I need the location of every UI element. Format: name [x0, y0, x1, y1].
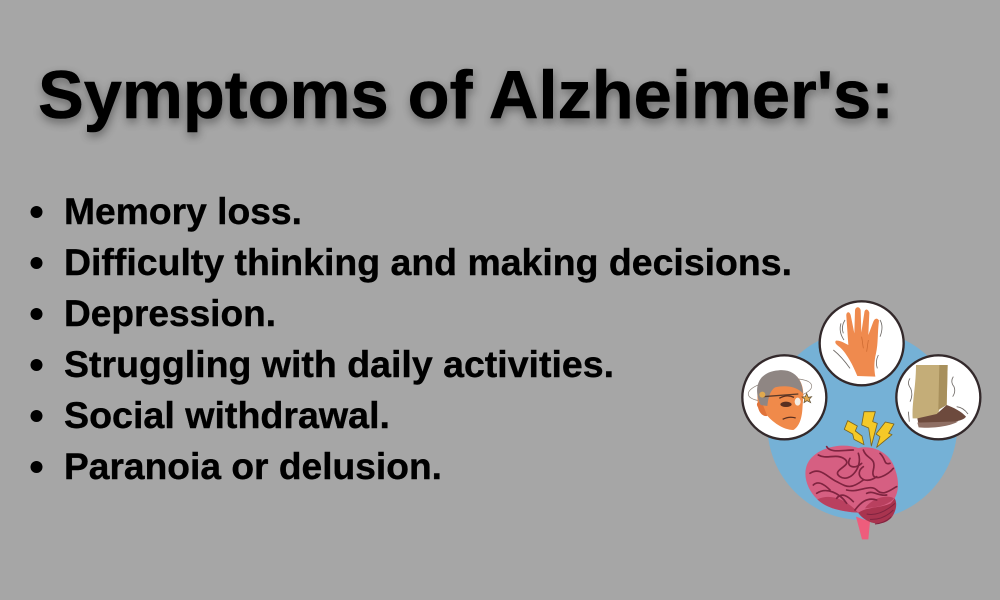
bullet: depression: Depression. [64, 293, 276, 334]
symptom list [30, 191, 792, 487]
illustration: symptoms of brain disorder [742, 301, 980, 539]
bullet: daily activities: Struggling with daily activities. [64, 344, 614, 385]
icon: dizzy head [742, 355, 826, 439]
bullet: social withdrawal: Social withdrawal. [64, 395, 390, 436]
title: Symptoms of Alzheimer's: [38, 57, 894, 133]
icon: brain [805, 446, 898, 539]
bullet: paranoia: Paranoia or delusion. [64, 446, 442, 487]
blue background circle [767, 330, 957, 520]
icon: shaking foot [896, 355, 980, 439]
icon: lightning bolts [844, 412, 894, 447]
bullet: difficulty thinking: Difficulty thinking and making decisions. [64, 242, 792, 283]
icon: shaking hand [820, 301, 904, 385]
bullet: memory loss: Memory loss. [64, 191, 302, 232]
